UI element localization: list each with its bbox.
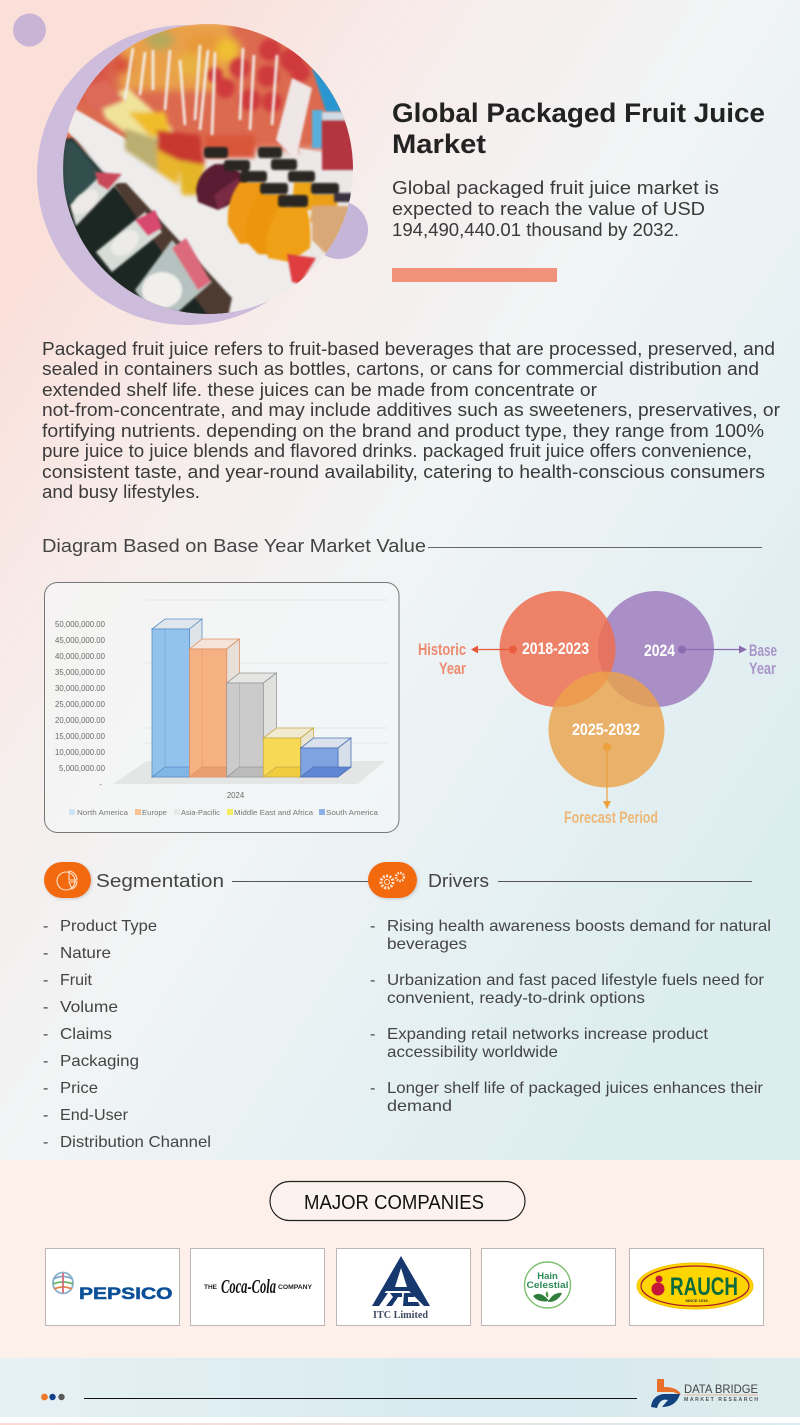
y axis labels: 15,000,000.00 xyxy=(55,732,106,741)
legend: Middle East and Africa xyxy=(234,808,314,817)
heading pill: major companies xyxy=(270,1182,525,1220)
segmentation list: Product Type xyxy=(60,918,157,935)
venn diagram xyxy=(418,591,777,827)
icon: gears xyxy=(368,862,417,898)
driver: health awareness: - xyxy=(370,918,375,935)
segmentation list: - xyxy=(43,1053,48,1070)
footer dots xyxy=(41,1394,65,1400)
arrow: forecast period xyxy=(603,743,611,809)
driver: urbanization xyxy=(370,972,765,1007)
panel: major companies xyxy=(0,1160,800,1358)
logo: Data Bridge Market Research: DATA BRIDGE xyxy=(684,1382,758,1396)
chart floor xyxy=(113,761,385,784)
subtitle text: 194,490,440.01 thousand by 2032. xyxy=(392,219,679,240)
tomatoes xyxy=(207,39,310,112)
logo: The Coca-Cola Company: Coca-Cola xyxy=(221,1276,276,1298)
small purple circle right of photo xyxy=(310,201,368,259)
description paragraph: fortifying nutrients. depending on the brand and product type, they range from 100% xyxy=(42,421,764,441)
red drink glass xyxy=(287,254,316,284)
salmon accent bar xyxy=(392,268,557,282)
bar: Middle East and Africa xyxy=(263,728,314,777)
y axis labels: 20,000,000.00 xyxy=(55,716,106,725)
right ice xyxy=(298,147,322,156)
label: Base Year: Base xyxy=(749,641,777,660)
ice shelf xyxy=(68,108,270,312)
logo: ITC Limited xyxy=(336,1248,470,1326)
y axis labels xyxy=(55,620,106,789)
segmentation list: Nature xyxy=(60,945,111,962)
divider lines xyxy=(232,880,752,882)
icon: pie chart xyxy=(44,862,91,898)
segmentation list: - xyxy=(43,1134,48,1151)
orange juice bottles xyxy=(228,182,350,262)
panel: drivers xyxy=(368,862,771,1115)
y axis labels: 10,000,000.00 xyxy=(55,748,106,757)
segmentation list: - xyxy=(43,918,48,935)
segmentation list: Price xyxy=(60,1080,98,1097)
driver: urbanization: - xyxy=(370,972,375,989)
logo: Hain Celestial: Celestial xyxy=(526,1280,568,1291)
driver: health awareness xyxy=(370,918,771,953)
label: Base Year: Year xyxy=(749,659,776,678)
logo: ITC Limited: ITC Limited xyxy=(373,1310,428,1321)
black bottle caps xyxy=(204,147,352,207)
arrow: base year xyxy=(678,646,747,654)
segmentation list: Fruit xyxy=(60,972,93,989)
logo: Hain Celestial: Hain xyxy=(537,1271,558,1282)
bar: Europe xyxy=(190,639,240,777)
bar: South America xyxy=(301,738,351,777)
legend xyxy=(69,808,379,817)
description paragraph: extended shelf life. these juices can be made from concentrate or xyxy=(42,380,597,400)
segmentation list: - xyxy=(43,945,48,962)
logo: The Coca-Cola Company: THE xyxy=(204,1284,218,1291)
y axis labels: 5,000,000.00 xyxy=(59,764,106,773)
logo: PepsiCo: PEPSICO xyxy=(79,1284,172,1303)
legend: North America xyxy=(77,808,129,817)
legend: Europe xyxy=(142,808,167,817)
label: 2018-2023: 2018-2023 xyxy=(522,639,589,658)
arrow: historic year xyxy=(471,646,517,654)
description paragraph: Packaged fruit juice refers to fruit-based beverages that are processed, preserved, and xyxy=(42,339,775,359)
footer band xyxy=(0,1358,800,1417)
dark berry bottles xyxy=(196,164,248,210)
subtitle text xyxy=(392,177,719,240)
label: Base Year xyxy=(749,641,777,678)
legend: Asia-Pacific xyxy=(181,808,220,817)
blue packaging and red packs xyxy=(312,110,323,148)
logo: Data Bridge Market Research xyxy=(651,1379,758,1408)
segmentation list: End-User xyxy=(60,1107,129,1124)
description paragraph: not-from-concentrate, and may include additives such as sweeteners, preservatives, or xyxy=(42,400,780,420)
segmentation list: - xyxy=(43,972,48,989)
segmentation list: Volume xyxy=(60,999,118,1016)
segmentation list: - xyxy=(43,1080,48,1097)
description paragraph xyxy=(42,339,780,502)
dark shelf below xyxy=(63,138,236,322)
bar: North America xyxy=(152,619,202,777)
driver: retail networks: - xyxy=(370,1026,375,1043)
segmentation list: Distribution Channel xyxy=(60,1134,211,1151)
title xyxy=(392,98,765,159)
y axis labels: 35,000,000.00 xyxy=(55,668,106,677)
description paragraph: sealed in containers such as bottles, cartons, or cans for commercial distribution and xyxy=(42,359,759,379)
subtitle text: Global packaged fruit juice market is xyxy=(392,177,719,198)
segmentation list: - xyxy=(43,1107,48,1124)
diagram heading: Diagram Based on Base Year Market Value xyxy=(42,536,426,556)
label: Historic Year: Historic xyxy=(418,640,466,659)
legend: South America xyxy=(326,808,379,817)
segmentation list: Claims xyxy=(60,1026,112,1043)
logo: Hain Celestial xyxy=(482,1248,616,1326)
driver: retail networks: Expanding retail networks increase product xyxy=(387,1026,709,1043)
label: Historic Year: Year xyxy=(439,659,466,678)
logo: Rauch: SINCE 1919. xyxy=(685,1298,709,1303)
label: 2024: 2024 xyxy=(644,641,675,660)
driver: shelf life: demand xyxy=(387,1098,452,1115)
panel: segmentation xyxy=(43,862,224,1151)
driver: urbanization: convenient, ready-to-drink options xyxy=(387,990,645,1007)
label: Forecast Period: Forecast Period xyxy=(564,808,658,827)
title: Global Packaged Fruit Juice xyxy=(392,98,765,128)
y axis labels: 45,000,000.00 xyxy=(55,636,106,645)
fruit cups row xyxy=(78,80,255,195)
y axis labels: 25,000,000.00 xyxy=(55,700,106,709)
logo: Rauch xyxy=(630,1248,764,1326)
driver: shelf life: - xyxy=(370,1080,375,1097)
y axis labels: 50,000,000.00 xyxy=(55,620,106,629)
driver: retail networks: accessibility worldwide xyxy=(387,1044,558,1061)
logo: Data Bridge Market Research: MARKET RESEARCH xyxy=(684,1397,758,1403)
shelf labels with coconuts xyxy=(67,172,212,312)
driver: shelf life xyxy=(370,1080,764,1115)
white price card xyxy=(276,78,312,160)
driver: shelf life: Longer shelf life of packaged juices enhances their xyxy=(387,1080,764,1097)
segmentation list: - xyxy=(43,1026,48,1043)
driver: health awareness: beverages xyxy=(387,936,467,953)
logo: The Coca-Cola Company xyxy=(190,1248,324,1326)
y axis labels: - xyxy=(99,780,102,789)
panel: 3D bar chart xyxy=(44,582,399,832)
logo: Rauch: RAUCH xyxy=(670,1273,738,1301)
bar: Asia-Pacific xyxy=(227,673,276,777)
segmentation list: - xyxy=(43,999,48,1016)
description paragraph: and busy lifestyles. xyxy=(42,482,200,502)
y axis labels: 40,000,000.00 xyxy=(55,652,106,661)
description paragraph: pure juice to juice blends and flavored drinks. packaged fruit juice offers convenience, xyxy=(42,441,752,461)
segmentation list xyxy=(43,918,211,1151)
logo: PepsiCo xyxy=(46,1248,180,1326)
label: 2025-2032: 2025-2032 xyxy=(572,720,640,739)
segmentation list: Packaging xyxy=(60,1053,139,1070)
title: Market xyxy=(392,129,486,159)
decorative purple circle top left xyxy=(13,14,46,46)
x axis label: 2024 xyxy=(227,791,245,800)
plastic forks xyxy=(125,45,277,135)
heading: Drivers: Drivers xyxy=(428,871,489,891)
logo: The Coca-Cola Company: COMPANY xyxy=(278,1284,313,1291)
description paragraph: consistent taste, and year-round availability, catering to health-conscious consumers xyxy=(42,462,765,482)
heading pill: major companies: MAJOR COMPANIES xyxy=(304,1192,484,1214)
blurred fruit backdrop xyxy=(60,20,360,150)
heading: Segmentation: Segmentation xyxy=(96,871,224,891)
large purple backing circle xyxy=(37,25,337,325)
blue backdrop xyxy=(312,68,345,112)
label: Historic Year xyxy=(418,640,466,678)
driver: health awareness: Rising health awareness boosts demand for natural xyxy=(387,918,771,935)
driver: retail networks xyxy=(370,1026,709,1061)
y axis labels: 30,000,000.00 xyxy=(55,684,106,693)
hero photo: juice bottles on ice xyxy=(60,20,360,322)
driver: urbanization: Urbanization and fast paced lifestyle fuels need for xyxy=(387,972,765,989)
subtitle text: expected to reach the value of USD xyxy=(392,198,705,219)
